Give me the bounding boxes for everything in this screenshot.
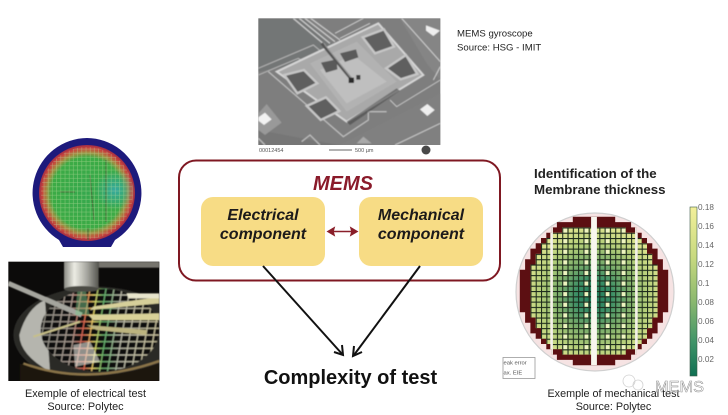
caption: electrical test: Exemple of electrical test xyxy=(25,388,146,400)
legend box: eak error xyxy=(504,360,527,366)
heading: MEMS: MEMS xyxy=(313,173,374,195)
box: electrical component xyxy=(201,197,325,266)
heading: complexity of test: Complexity of test xyxy=(264,367,438,389)
micrograph scale strip: 500 µm xyxy=(355,148,374,154)
caption: mechanical test: Exemple of mechanical test xyxy=(547,388,680,400)
color scale: 0.12 xyxy=(698,260,714,269)
watermark: MEMS xyxy=(655,379,704,396)
color scale: 0.02 xyxy=(698,355,714,364)
legend box: ax. EIE xyxy=(504,370,522,376)
color scale: 0.06 xyxy=(698,317,714,326)
box: mechanical component xyxy=(359,197,483,266)
color scale xyxy=(690,203,714,376)
color scale: 0.08 xyxy=(698,298,714,307)
photo: MEMS gyroscope micrograph xyxy=(258,18,440,147)
heading: membrane thickness: Identification of the xyxy=(534,166,657,181)
watermark xyxy=(623,375,704,396)
color scale: 0.04 xyxy=(698,336,714,345)
arrow: electrical to complexity xyxy=(263,266,343,355)
caption: mechanical test: Source: Polytec xyxy=(576,401,652,413)
micrograph scale strip: 00012454 xyxy=(259,148,283,154)
box: mechanical component: component xyxy=(378,226,465,243)
photo: electrical probe test xyxy=(8,262,160,381)
color scale: 0.16 xyxy=(698,222,714,231)
color scale: 0.14 xyxy=(698,241,714,250)
caption: MEMS gyroscope: Source: HSG - IMIT xyxy=(457,42,541,54)
color scale: 0.1 xyxy=(698,279,710,288)
membrane thickness wafer map xyxy=(516,212,674,371)
heading: membrane thickness: Membrane thickness xyxy=(534,182,666,197)
box: electrical component: component xyxy=(220,226,307,243)
arrow: electrical to mechanical xyxy=(328,228,357,235)
box: mechanical component: Mechanical xyxy=(378,207,465,224)
panel: MEMS frame xyxy=(179,160,500,280)
legend box xyxy=(503,358,535,378)
electrical wafer map xyxy=(30,136,145,249)
caption: MEMS gyroscope: MEMS gyroscope xyxy=(457,28,533,40)
arrow: mechanical to complexity xyxy=(353,266,420,356)
box: electrical component: Electrical xyxy=(227,207,299,224)
micrograph scale strip xyxy=(259,146,430,154)
color scale: 0.18 xyxy=(698,203,714,212)
caption: electrical test: Source: Polytec xyxy=(47,401,124,413)
